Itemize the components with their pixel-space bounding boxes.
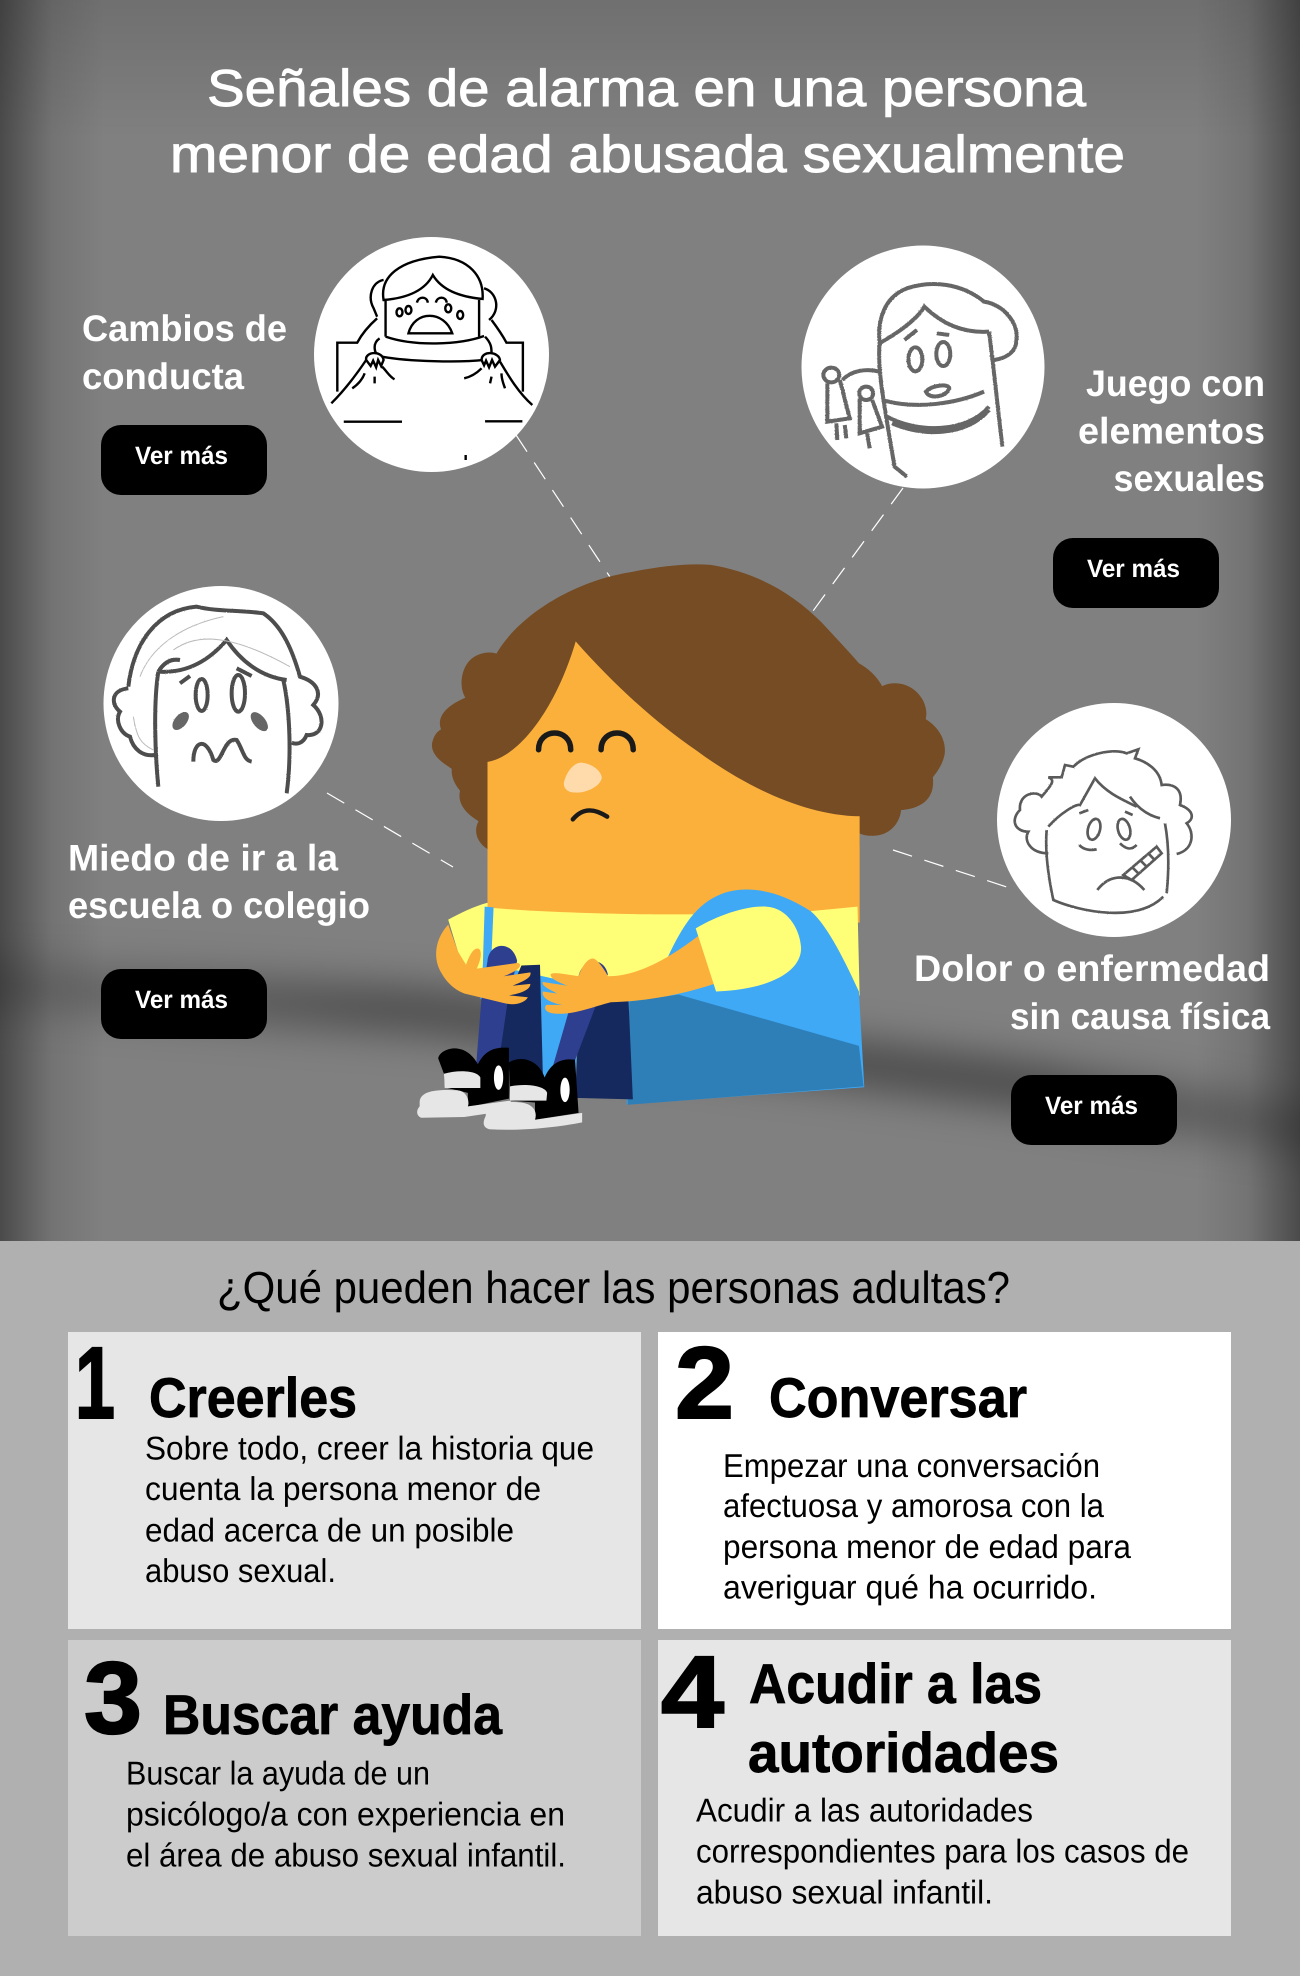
overalls bbox=[480, 889, 864, 1104]
panel: step 3: Buscar ayuda bbox=[163, 1683, 503, 1746]
button: ver más 3: Ver más bbox=[135, 986, 228, 1014]
panel: step 1: 1 bbox=[75, 1326, 115, 1440]
panel: step 2: persona menor de edad para bbox=[723, 1528, 1132, 1565]
overalls shadow bbox=[627, 995, 864, 1105]
button: ver más 2: Ver más bbox=[1087, 555, 1180, 583]
panel: step 2: afectuosa y amorosa con la bbox=[723, 1487, 1105, 1524]
button: ver más 4 bbox=[1011, 1075, 1177, 1145]
icon: sick child with thermometer circle bbox=[997, 703, 1231, 937]
right shoe bbox=[484, 1059, 582, 1130]
button: ver más 2 bbox=[1053, 538, 1219, 608]
panel: step 4: 4 bbox=[661, 1635, 724, 1749]
label: cambios de conducta bbox=[82, 308, 287, 397]
label: dolor o enfermedad: sin causa física bbox=[1010, 996, 1270, 1037]
panel: step 3: el área de abuso sexual infantil. bbox=[126, 1836, 566, 1874]
panel: step 4: Acudir a las bbox=[749, 1652, 1042, 1715]
panel: top background bbox=[0, 0, 1300, 1241]
label: juego con elementos sexuales: sexuales bbox=[1114, 458, 1265, 499]
button: ver más 1: Ver más bbox=[135, 442, 228, 470]
dashed connector lines bbox=[327, 435, 1010, 888]
face bbox=[487, 641, 860, 923]
panel: step 4: abuso sexual infantil. bbox=[696, 1874, 993, 1910]
panel: step 4 bbox=[658, 1635, 1231, 1936]
panel: step 1: abuso sexual. bbox=[145, 1552, 336, 1589]
panel: step 4: Acudir a las autoridades bbox=[696, 1792, 1033, 1828]
label: juego con elementos sexuales bbox=[1078, 363, 1265, 499]
panel: step 2: averiguar qué ha ocurrido. bbox=[723, 1568, 1097, 1606]
label: miedo de ir a la escuela bbox=[68, 838, 370, 926]
shirt bbox=[448, 903, 860, 1007]
title bbox=[170, 60, 1125, 184]
panel: step 1: edad acerca de un posible bbox=[145, 1512, 514, 1548]
illustration: sad child sitting bbox=[417, 564, 945, 1130]
panel: step 2: 2 bbox=[675, 1326, 734, 1440]
panel: step 2: Empezar una conversación bbox=[723, 1447, 1100, 1484]
title: Señales de alarma en una persona bbox=[207, 60, 1086, 118]
left shoe bbox=[417, 1048, 511, 1118]
panel: step 1: cuenta la persona menor de bbox=[145, 1470, 541, 1507]
arms and hands bbox=[436, 925, 531, 1004]
panel: step 4: autoridades bbox=[748, 1721, 1059, 1784]
button: ver más 4: Ver más bbox=[1045, 1092, 1138, 1120]
panel: step 4: correspondientes para los casos de bbox=[696, 1832, 1189, 1870]
hair bbox=[432, 564, 945, 858]
panel: step 2 bbox=[658, 1326, 1231, 1629]
icon: scared child circle bbox=[104, 586, 338, 821]
panel: step 1 bbox=[68, 1326, 641, 1629]
icon: child with dolls circle bbox=[802, 246, 1044, 488]
label: dolor o enfermedad: Dolor o enfermedad bbox=[914, 948, 1270, 989]
nose bbox=[564, 763, 602, 793]
panel: step 3: 3 bbox=[84, 1641, 142, 1755]
label: juego con elementos sexuales: Juego con bbox=[1086, 363, 1265, 404]
legs bbox=[480, 965, 543, 1076]
panel: lower background bbox=[0, 1241, 1300, 1976]
button: ver más 3 bbox=[101, 969, 267, 1039]
panel: step 3: Buscar la ayuda de un bbox=[126, 1754, 430, 1792]
label: dolor o enfermedad bbox=[914, 948, 1270, 1037]
panel: step 1: Sobre todo, creer la historia que bbox=[145, 1430, 594, 1466]
label: cambios de conducta: Cambios de bbox=[82, 308, 287, 349]
title: menor de edad abusada sexualmente bbox=[170, 126, 1125, 184]
sleeve bbox=[696, 907, 801, 992]
mouth bbox=[573, 810, 607, 819]
icon: crying child in bed circle bbox=[314, 237, 549, 472]
button: ver más 1 bbox=[101, 425, 267, 495]
panel: step 2: Conversar bbox=[769, 1366, 1027, 1429]
label: miedo de ir a la escuela: Miedo de ir a la bbox=[68, 838, 338, 878]
panel: step 1: Creerles bbox=[149, 1366, 357, 1429]
label: miedo de ir a la escuela: escuela o colegio bbox=[68, 885, 370, 926]
label: cambios de conducta: conducta bbox=[82, 356, 244, 397]
eyes bbox=[539, 733, 633, 750]
heading: adults: ¿Qué pueden hacer las personas adultas? bbox=[217, 1262, 1010, 1313]
panel: step 3 bbox=[68, 1640, 641, 1936]
panel: step 3: psicólogo/a con experiencia en bbox=[126, 1796, 565, 1832]
label: juego con elementos sexuales: elementos bbox=[1078, 410, 1265, 452]
